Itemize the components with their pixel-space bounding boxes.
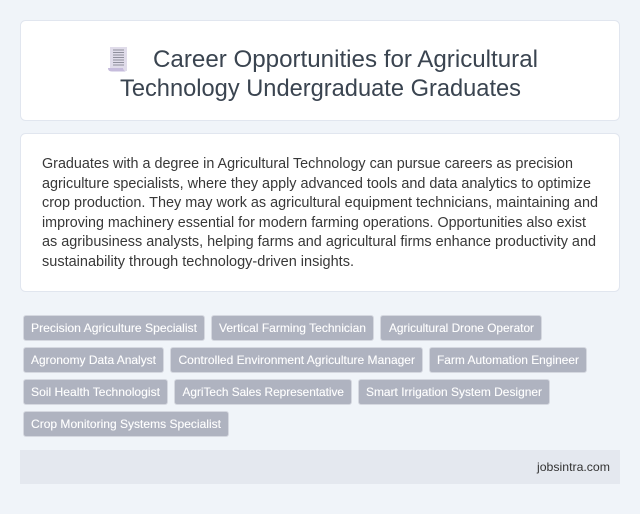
- text block: description: [42, 156, 598, 270]
- tag: Soil Health Technologist: [31, 385, 161, 399]
- tag: Agricultural Drone Operator: [389, 321, 534, 335]
- title: Technology Undergraduate Graduates: [120, 75, 521, 102]
- title: Career Opportunities for Agricultural: [153, 46, 538, 73]
- footer text: jobsintra.com: [536, 460, 610, 474]
- tag: [430, 348, 586, 372]
- text block: description: crop production. They may work as agricultural equipment technicians, maintaining and: [42, 195, 598, 211]
- tag: Controlled Environment Agriculture Manager: [178, 353, 415, 367]
- panel: title header: [20, 20, 620, 120]
- text block: description: agriculture specialists, where they apply advanced tools and data analytics to optimize: [42, 176, 591, 192]
- title: [120, 46, 538, 102]
- tag: Farm Automation Engineer: [437, 353, 579, 367]
- tag: Smart Irrigation System Designer: [366, 385, 542, 399]
- text block: description: sustainability through technology-driven insights.: [42, 254, 354, 270]
- tag: Vertical Farming Technician: [219, 321, 366, 335]
- tag: [24, 412, 228, 436]
- icon: document scroll: [108, 47, 127, 72]
- tag: [24, 380, 168, 404]
- tag: AgriTech Sales Representative: [182, 385, 344, 399]
- text block: description: Graduates with a degree in Agricultural Technology can pursue careers as precision: [42, 156, 573, 172]
- tag: [24, 348, 164, 372]
- tag: Agronomy Data Analyst: [31, 353, 157, 367]
- tag: Precision Agriculture Specialist: [31, 321, 198, 335]
- tag: [174, 380, 352, 404]
- tag list: [24, 316, 586, 436]
- tag: Crop Monitoring Systems Specialist: [31, 417, 222, 431]
- tag: [170, 348, 422, 372]
- tag: [358, 380, 550, 404]
- tag: [212, 316, 374, 340]
- text block: description: as agribusiness analysts, helping farms and agricultural firms enhance productivity and: [42, 234, 596, 250]
- footer: [20, 450, 620, 484]
- tag: [24, 316, 204, 340]
- panel: description: [20, 134, 620, 292]
- tag: [380, 316, 542, 340]
- text block: description: improving machinery essential for modern farming operations. Opportunities also exist: [42, 215, 586, 231]
